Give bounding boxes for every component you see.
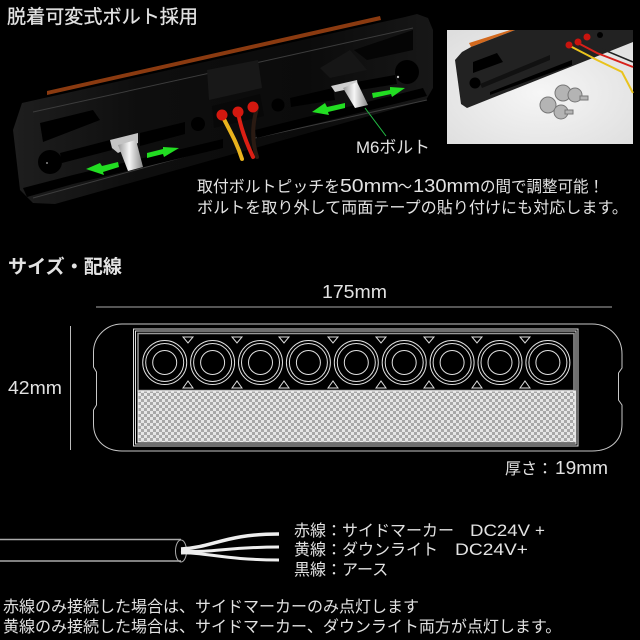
thickness label: 19mm [555,458,608,478]
connection note [3,598,561,636]
heading: size and wiring: サイズ・配線 [8,255,122,278]
wiring diagram [0,534,279,562]
description text [197,176,628,217]
green arrows: right bolt [312,87,405,115]
triangles between LEDs [183,337,530,388]
bolt callout line [365,108,386,136]
amber reflector strip [47,16,381,95]
cable sheath [0,540,181,561]
inner frames [134,329,578,446]
outer outline [94,324,622,451]
left bolt [110,133,143,171]
photo: LED marker rear view with bolts [13,14,433,204]
description text: 取付ボルトピッチを [197,178,340,196]
wire legend: DC24V+ [455,540,528,559]
wire legend: 黄線：ダウンライト [294,541,438,559]
wires [222,108,257,159]
reflector panel [138,391,575,442]
red connector rings [216,110,228,120]
label: M6 bolt: M6ボルト [356,138,430,157]
center connector block [207,60,262,100]
right bolt [331,80,368,108]
end holes [38,150,62,174]
connection note: 黄線のみ接続した場合は、サイドマーカー、ダウンライト両方が点灯します。 [3,618,561,636]
technical drawing of lamp [94,324,622,451]
wire legend [294,521,545,579]
inset background [447,30,633,144]
inset wires [587,38,633,62]
description text: ボルトを取り外して両面テープの貼り付けにも対応します。 [197,199,628,217]
description text: 〜 [398,179,412,196]
heading: removable bolt: 脱着可変式ボルト採用 [7,6,198,28]
connection note: 赤線のみ接続した場合は、サイドマーカーのみ点灯します [3,598,419,616]
marker body [13,14,433,204]
thickness label: 厚さ： [505,460,553,478]
wire legend: + [535,521,545,540]
thickness label [505,458,608,478]
description text: の間で調整可能！ [480,178,604,196]
height dimension [8,326,70,450]
long grooves [73,139,223,184]
wire legend: 黒線：アース [294,561,388,579]
wire legend: DC24V [470,521,531,540]
green arrows: left bolt [86,147,179,175]
width dimension: 175mm [322,282,387,302]
LED circles [143,340,570,384]
inset bolts [540,85,588,119]
height dimension: 42mm [8,378,62,398]
amber edge [469,30,515,47]
upper recesses [40,110,100,142]
inset marker body [455,30,633,108]
description text: 130mm [413,176,480,196]
description text: 50mm [340,176,399,196]
three wires [181,534,279,549]
edge highlights [33,28,427,198]
slots [60,140,112,163]
wire legend: 赤線：サイドマーカー [294,522,454,540]
inset photo: bolts and marker on white [447,30,633,144]
